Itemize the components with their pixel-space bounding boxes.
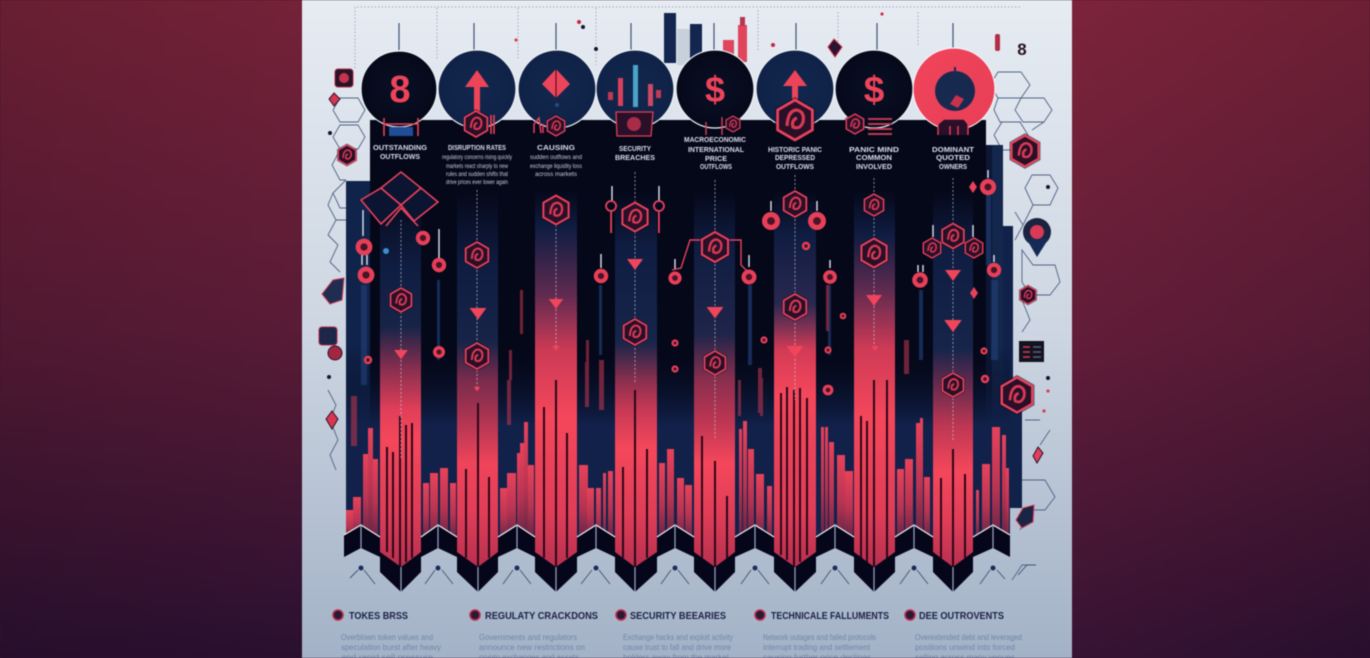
- column 1 label: OUTFLOWS: [380, 152, 420, 161]
- descending column 7: [854, 190, 895, 572]
- column 6 label: HISTORIC PANIC: [768, 145, 823, 154]
- legend: token bubbles: speculation burst after heavy: [341, 642, 442, 652]
- column 7 label: PANIC MIND: [849, 145, 900, 154]
- column 7 label: INVOLVED: [856, 162, 893, 171]
- descending column 3: [535, 190, 577, 572]
- dark lines inside columns: [387, 380, 965, 567]
- column 1 label: [373, 143, 427, 161]
- circle 3: diamond: [518, 50, 596, 138]
- circle 1: dollar-eight icon: 8: [389, 69, 411, 111]
- legend: security breaches: cause trust to fall and drive more: [623, 642, 731, 652]
- legend: technical failures: Network outages and failed protocols: [763, 632, 876, 642]
- left side icons: [319, 69, 357, 429]
- descending column 5: [694, 190, 735, 572]
- legend: debt events: positions unwind into forced: [915, 642, 1015, 652]
- column 5 label: INTERNATIONAL: [688, 145, 744, 154]
- legend: security breaches: SECURITY BEEARIES: [630, 610, 726, 622]
- legend: technical failures: [755, 610, 889, 658]
- descending column 2: [457, 190, 498, 572]
- column 2 label: drive prices ever lower again: [446, 179, 508, 186]
- column 5 label: [684, 135, 747, 171]
- circle 5: dollar: [676, 50, 754, 135]
- column 3 nodes: [542, 186, 659, 351]
- legend: regulatory crackdowns: REGULATY CRACKDONS: [485, 610, 598, 622]
- zigzag chevron band: [344, 525, 1010, 592]
- small tripod markers below peaks: [350, 565, 1036, 584]
- dark main field: [370, 120, 986, 540]
- central light panel: [302, 0, 1072, 658]
- tripod dots: [358, 566, 996, 570]
- column 8 nodes: [922, 170, 1001, 399]
- column 8 label: OWNERS: [939, 162, 967, 171]
- column 8 label: DOMINANT: [932, 145, 974, 154]
- double diamond node, column 1: [361, 172, 438, 226]
- dotted connectors in columns: [401, 172, 953, 460]
- top mini bars: [664, 13, 747, 65]
- hexagon lattice right: [990, 72, 1060, 580]
- column 3 label: exchange liquidity loss: [530, 163, 583, 170]
- column 2 label: DISRUPTION RATES: [448, 143, 506, 152]
- chevron white highlights: [344, 525, 1010, 592]
- connector stubs above circles: [399, 23, 953, 50]
- scattered top dots: [514, 12, 884, 57]
- right side icons: [1000, 133, 1051, 528]
- circle 8: red crash globe: [913, 48, 995, 135]
- column 7 label: COMMON: [856, 153, 892, 162]
- column 4 label: BREACHES: [615, 153, 655, 162]
- column 4 label: [615, 144, 655, 162]
- column 1 nodes: [356, 210, 446, 364]
- legend: regulatory crackdowns: announce new restrictions on: [479, 642, 585, 652]
- column 8 label: QUOTED: [936, 153, 971, 162]
- legend: debt events: Overextended debt and leveraged: [915, 632, 1022, 642]
- descending column 8: [933, 190, 973, 572]
- top dotted frame: [355, 7, 1020, 68]
- circle 2: up arrow: [438, 50, 516, 139]
- descending column 4: [615, 190, 657, 572]
- descending column 6: [774, 190, 816, 572]
- column 5 label: PRICE: [705, 154, 727, 163]
- circle 7: dollar with table: [835, 50, 913, 136]
- navy gaps between columns: [346, 345, 1010, 540]
- column 4 nodes: [606, 200, 682, 373]
- bar chart clusters in gaps: [346, 418, 1009, 540]
- column 2 label: regulatory concerns rising quickly: [442, 154, 513, 161]
- column 7 nodes: [860, 192, 928, 351]
- circle 1: dollar-eight icon: [361, 51, 437, 136]
- right background panel: [1072, 0, 1370, 658]
- column 6 label: DEPRESSED: [775, 153, 816, 162]
- legend: token bubbles: TOKES BRSS: [349, 610, 408, 622]
- column 4 label: SECURITY: [619, 144, 651, 153]
- column 2 label: markets react sharply to new: [446, 163, 508, 170]
- top right marks: [995, 34, 1027, 59]
- column 6 label: [768, 145, 823, 171]
- blue streaks under nodes: [361, 195, 998, 385]
- column 2 label: rules and sudden shifts that: [446, 171, 508, 178]
- right side bars: [985, 145, 1022, 530]
- column 3 label: sudden outflows and: [530, 154, 582, 161]
- column 5 label: OUTFLOWS: [700, 162, 732, 171]
- column 3 label: CAUSING: [537, 143, 575, 152]
- legend: security breaches: Exchange hacks and exploit activity: [623, 632, 734, 642]
- legend: debt events: [905, 610, 1022, 658]
- top right marks: 8: [1017, 40, 1027, 59]
- column 6 nodes: [760, 189, 846, 395]
- legend: technical failures: interrupt trading and settlement: [763, 642, 871, 652]
- legend: token bubbles: Overblown token values and: [341, 632, 433, 642]
- column 3 label: across markets: [535, 171, 578, 178]
- column 5 label: MACROECONOMIC: [684, 135, 747, 144]
- column 8 label: [932, 145, 974, 171]
- legend: technical failures: TECHNICALE FALLUMENTS: [771, 610, 889, 622]
- column 7 label: [849, 145, 900, 171]
- legend: regulatory crackdowns: Governments and regulators: [479, 632, 577, 642]
- column 1 label: OUTSTANDING: [373, 143, 427, 152]
- column 6 label: OUTFLOWS: [776, 162, 814, 171]
- legend: regulatory crackdowns: [470, 610, 598, 658]
- legend: debt events: DEE OUTROVENTS: [919, 610, 1004, 622]
- circle 6: up arrow with hexagon: [756, 50, 834, 143]
- circle 7: dollar with table: $: [864, 69, 885, 110]
- legend: security breaches: [616, 610, 734, 658]
- left side bar: [346, 181, 370, 526]
- column 5 bracket node: [672, 230, 756, 377]
- column 2 label: [442, 143, 513, 186]
- column 3 label: [530, 143, 583, 178]
- legend: token bubbles: [333, 610, 442, 658]
- upper streak bars in gaps: [351, 285, 909, 446]
- descending column 1: [380, 190, 421, 572]
- circle 4: bar icon: [596, 50, 674, 136]
- left background panel: [0, 0, 302, 658]
- circle 5: dollar: $: [705, 69, 725, 110]
- column 2 nodes: [464, 240, 490, 391]
- hexagon lattice left: [328, 98, 365, 470]
